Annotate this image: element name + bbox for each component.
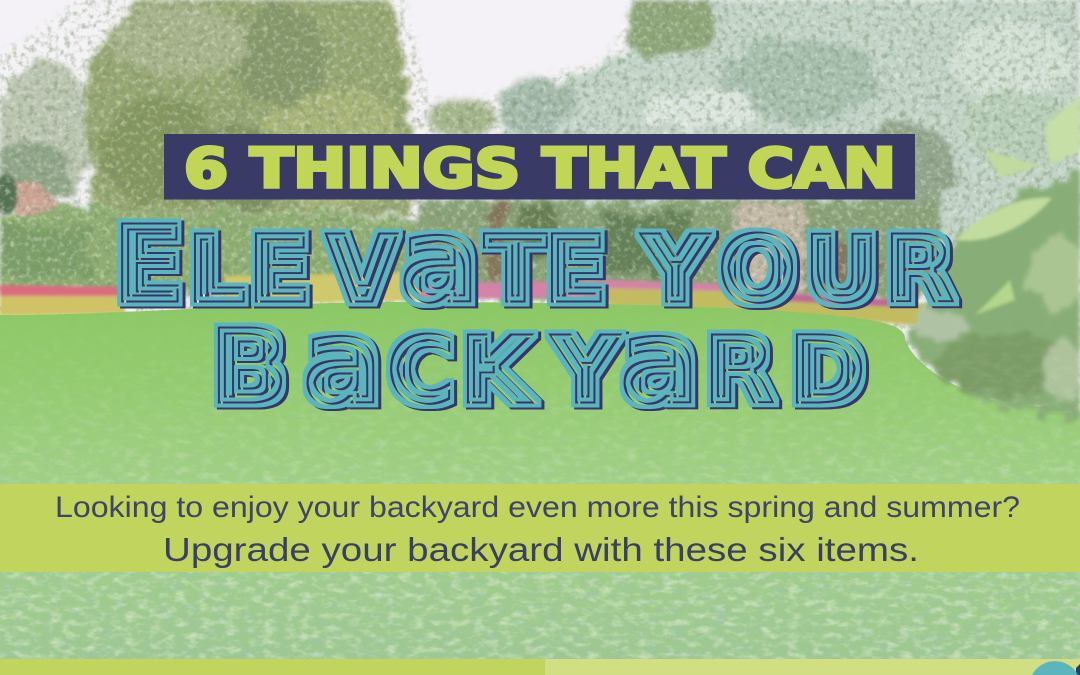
intro line 2: Upgrade your backyard with these six items. <box>163 532 919 569</box>
intro line 1: Looking to enjoy your backyard even more this spring and summer? <box>55 491 1020 524</box>
foliage texture light <box>0 0 1080 290</box>
title line 2: a <box>303 293 382 430</box>
grass light blades <box>0 362 1080 659</box>
sky clearing <box>0 0 632 100</box>
left distant tree <box>0 60 95 210</box>
bottom bar right <box>545 659 1080 675</box>
banana leaves <box>955 95 1080 315</box>
right pale foliage <box>490 0 1080 260</box>
house <box>0 175 60 215</box>
title: elevate your backyard <box>113 192 955 430</box>
title line 2: a <box>620 293 699 430</box>
lawn <box>0 302 1080 675</box>
flower beds <box>0 272 925 326</box>
title line 2: B <box>210 308 288 427</box>
title line 1: YOUR <box>641 216 955 323</box>
title line 1: a <box>400 192 479 329</box>
heading: 6 things that can: 6 THINGS THAT CAN <box>184 137 896 200</box>
bottom bar left <box>0 659 545 675</box>
palm behind banner <box>428 98 496 138</box>
grass dark blades <box>0 394 1080 659</box>
right banana plants and shrubs <box>905 170 1080 420</box>
title line 1: LEV <box>187 216 397 323</box>
large central tree <box>85 0 413 215</box>
foliage texture dark <box>0 0 1080 290</box>
title line 1: TE <box>484 216 607 323</box>
central garden <box>420 200 940 300</box>
intro band <box>0 484 1080 572</box>
grass texture <box>0 348 1080 659</box>
icon: teal circle <box>1032 661 1080 675</box>
banner: 6 things that can <box>164 134 915 200</box>
title line 2: RD <box>704 317 865 424</box>
title line 1: E <box>113 204 185 326</box>
hedge <box>0 207 440 295</box>
title line 2: CKY <box>387 317 620 424</box>
